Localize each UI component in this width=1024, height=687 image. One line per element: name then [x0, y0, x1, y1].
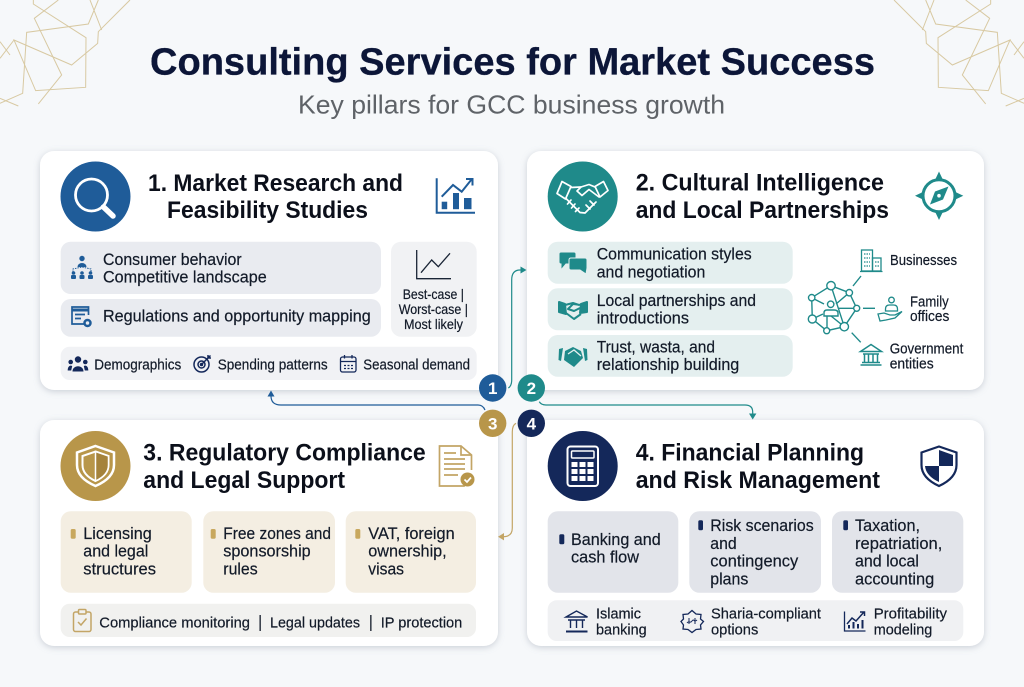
arrow: 2 to 4	[539, 402, 756, 420]
box: scenarios: Worst-case |	[399, 301, 468, 317]
heading: Feasibility Studies	[167, 197, 368, 224]
badge: 3	[479, 410, 506, 437]
icon: compass	[915, 172, 963, 220]
heading: 1. Market Research and	[148, 170, 403, 197]
box: free zones: Free zones and	[223, 524, 331, 543]
box: taxation: repatriation,	[855, 534, 942, 553]
icon: network	[808, 276, 875, 342]
strip: compliance: Compliance monitoring	[99, 614, 250, 631]
heading: and Legal Support	[143, 467, 345, 494]
box: trust and wasta: relationship building	[597, 355, 739, 374]
heading	[143, 440, 426, 494]
strip: compliance: Legal updates	[270, 614, 360, 631]
icon: star badge	[681, 610, 704, 632]
strip: demographics, spending, seasonal	[61, 347, 477, 380]
diagram: stakeholder network	[808, 250, 964, 372]
strip: islamic finance: modeling	[874, 621, 932, 638]
badge: 2	[518, 374, 545, 402]
box: regulations and opportunity mapping: Regulations and opportunity mapping	[103, 307, 371, 326]
icon: audience hierarchy	[71, 256, 93, 279]
icon: government building	[860, 344, 882, 365]
heading: 3. Regulatory Compliance	[143, 440, 426, 467]
box: scenarios: Most likely	[404, 316, 463, 332]
box: scenarios: Best-case |	[403, 286, 464, 302]
badge: 1	[479, 374, 506, 402]
box: communication: and negotiation	[597, 262, 705, 281]
icon: chat bubbles	[559, 252, 587, 274]
icon: solid handshake	[558, 347, 588, 367]
arrow: 4 to 3	[498, 423, 516, 540]
box: licensing: structures	[83, 559, 156, 578]
panel: cultural intelligence	[527, 151, 984, 390]
box: free zones	[203, 511, 335, 593]
icon: calendar	[340, 355, 356, 372]
icon: line chart	[417, 250, 451, 279]
box: scenarios	[391, 242, 477, 337]
icon: people	[68, 356, 88, 372]
box: licensing: and legal	[83, 542, 148, 561]
box: taxation: accounting	[855, 569, 934, 588]
box: licensing	[61, 511, 192, 593]
panel: financial planning	[527, 420, 984, 646]
heading: and Local Partnerships	[636, 197, 889, 224]
icon: handshake	[548, 162, 618, 232]
icon: document with check	[440, 446, 474, 486]
box: communication	[548, 242, 793, 284]
box: trust and wasta: Trust, wasta, and	[597, 337, 715, 356]
icon: shield	[60, 431, 130, 501]
box: risk scenarios: Risk scenarios	[710, 516, 814, 535]
box: risk scenarios: plans	[710, 569, 748, 588]
box: VAT: VAT, foreign	[368, 524, 455, 543]
box: risk scenarios: contingency	[710, 552, 799, 571]
icon: outline handshake	[559, 302, 587, 319]
heading	[148, 170, 403, 224]
panel: regulatory compliance	[40, 420, 498, 646]
decoration: top-right geometric lines	[894, 0, 1024, 106]
badge: 4	[518, 410, 545, 437]
box: taxation: and local	[855, 552, 919, 571]
box: VAT	[346, 511, 476, 593]
icon: magnifier	[60, 162, 130, 232]
box: consumer behavior and competitive landscape: Consumer behavior	[103, 250, 242, 269]
icon: form with gear	[72, 307, 90, 326]
box: VAT: ownership,	[368, 542, 447, 561]
box: consumer behavior and competitive landscape	[61, 242, 381, 294]
icon: hand with person	[878, 297, 902, 321]
icon: profit chart	[844, 612, 866, 631]
strip: islamic finance: Sharia-compliant	[711, 605, 822, 622]
badge: 1: 1	[488, 379, 497, 398]
heading	[636, 170, 889, 224]
strip: compliance	[61, 604, 476, 637]
box: taxation: Taxation,	[855, 516, 920, 535]
box: licensing: Licensing	[83, 524, 152, 543]
box: communication: Communication styles	[597, 244, 752, 263]
strip: islamic finance: Profitability	[874, 605, 947, 622]
decoration: top-left geometric lines	[0, 0, 130, 106]
icon: calculator	[548, 431, 618, 501]
strip: islamic finance: Islamic	[596, 605, 641, 622]
box: free zones: rules	[223, 559, 258, 578]
box: local partnerships: introductions	[597, 308, 689, 327]
subtitle: Key pillars for GCC business growth	[298, 90, 725, 120]
icon: bar chart with arrow	[437, 178, 475, 213]
heading: 2. Cultural Intelligence	[636, 170, 884, 197]
box: banking: cash flow	[571, 548, 640, 567]
strip: demographics, spending, seasonal: Spending patterns	[218, 356, 328, 373]
diagram: stakeholder network: Family	[910, 294, 949, 311]
box: VAT: visas	[368, 559, 404, 578]
arrow: 3 to 1	[268, 390, 485, 410]
diagram: stakeholder network: Businesses	[890, 252, 957, 269]
diagram: stakeholder network: Government	[890, 341, 964, 358]
strip: islamic finance: options	[711, 621, 758, 638]
box: local partnerships	[548, 288, 793, 330]
box: trust and wasta	[548, 335, 793, 377]
icon: bank	[566, 611, 588, 632]
strip: compliance: IP protection	[381, 614, 462, 631]
strip: demographics, spending, seasonal: Demographics	[94, 356, 181, 373]
diagram: stakeholder network: entities	[890, 355, 934, 372]
box: risk scenarios: and	[710, 534, 737, 553]
title: Consulting Services for Market Success	[150, 42, 875, 84]
heading: and Risk Management	[636, 467, 880, 494]
box: banking	[548, 511, 678, 593]
badge: 4: 4	[527, 414, 537, 433]
strip: demographics, spending, seasonal: Seasonal demand	[363, 356, 470, 373]
heading	[636, 440, 880, 494]
box: regulations and opportunity mapping	[61, 299, 381, 337]
icon: buildings	[860, 250, 882, 272]
box: local partnerships: Local partnerships and	[597, 291, 756, 310]
box: taxation	[832, 511, 963, 593]
icon: clipboard	[74, 610, 91, 632]
strip: islamic finance	[548, 600, 963, 641]
badge: 2: 2	[527, 379, 536, 398]
box: consumer behavior and competitive landscape: Competitive landscape	[103, 268, 267, 287]
box: risk scenarios	[689, 511, 821, 593]
panel: market research	[40, 151, 498, 390]
arrow: 1 to 2	[508, 266, 526, 388]
box: free zones: sponsorship	[223, 542, 311, 561]
box: banking: Banking and	[571, 530, 661, 549]
icon: quartered shield	[922, 446, 956, 486]
diagram: stakeholder network: offices	[910, 308, 949, 325]
icon: target	[194, 355, 211, 372]
strip: islamic finance: banking	[596, 621, 647, 638]
heading: 4. Financial Planning	[636, 440, 864, 467]
badge: 3: 3	[488, 414, 497, 433]
